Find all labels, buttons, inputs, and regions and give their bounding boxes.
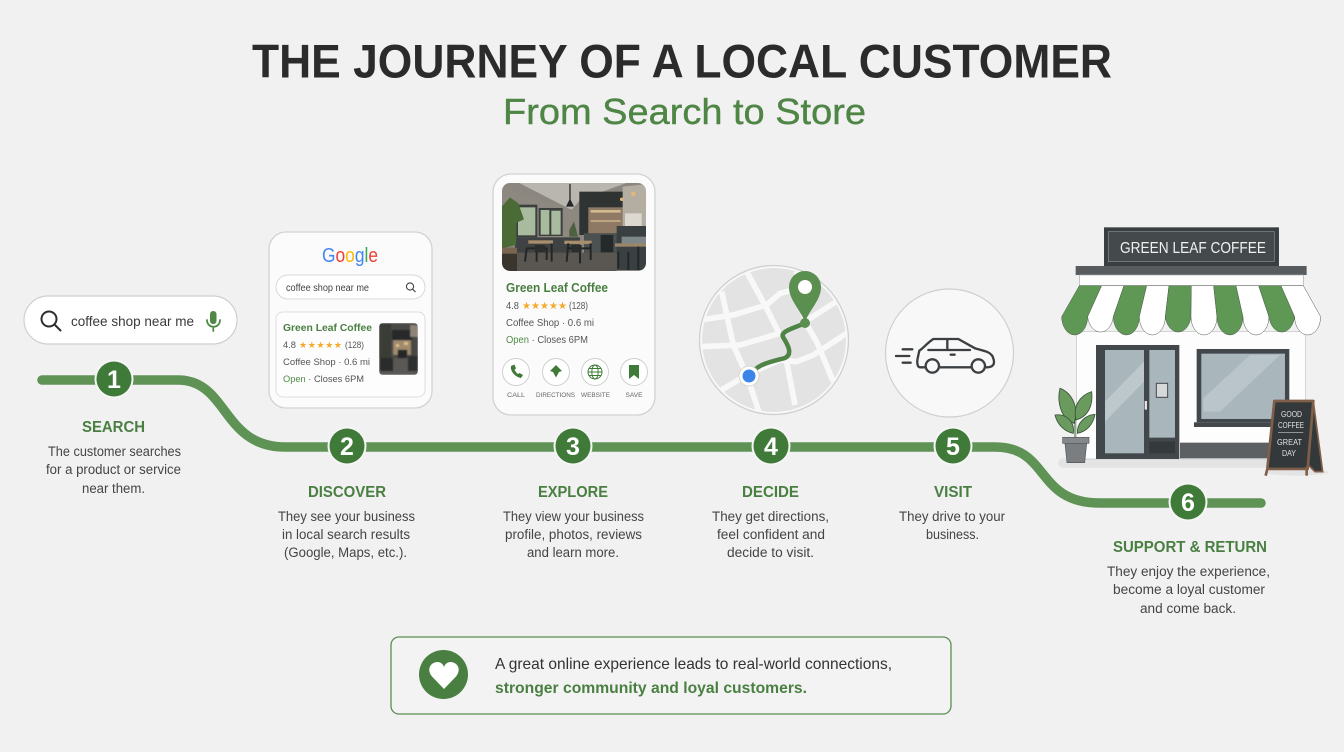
icon: call: [502, 358, 530, 399]
door: [1096, 345, 1179, 459]
chalkboard text: [1277, 410, 1304, 458]
icon: directions: DIRECTIONS: [536, 392, 576, 399]
subtitle: From Search to Store: [503, 91, 866, 132]
step 3 text: [503, 484, 644, 560]
step 6 text: become a loyal customer: [1113, 582, 1266, 597]
icon: car: [896, 339, 994, 373]
step 2 text: (Google, Maps, etc.).: [284, 545, 407, 560]
callout: [391, 637, 951, 714]
icon: save: SAVE: [626, 392, 643, 399]
step 2 text: DISCOVER: [308, 484, 386, 501]
step 5 marker: [934, 426, 972, 466]
search query: coffee shop near me: [71, 313, 194, 329]
step 4 text: decide to visit.: [727, 545, 814, 560]
hours: Open · Closes 6PM: [506, 335, 588, 346]
journey path: [42, 380, 1261, 503]
step 1 text: SEARCH: [82, 419, 145, 436]
listing card: (128): [345, 340, 364, 351]
route: [749, 323, 805, 376]
chalkboard legs: [1307, 402, 1323, 472]
storefront illustration: [1055, 227, 1328, 476]
step 4 text: DECIDE: [742, 484, 799, 501]
panel: search bar: [24, 296, 237, 344]
step 4 marker: [752, 426, 790, 466]
panel: business profile card: [493, 174, 655, 415]
rating: ★★★★★: [522, 301, 567, 312]
step 6 text: They enjoy the experience,: [1107, 564, 1270, 579]
icon: directions: [536, 358, 576, 399]
step 2 marker: 2: [340, 433, 354, 461]
step 6 marker: [1168, 482, 1208, 522]
icon: origin dot: [739, 366, 759, 386]
step 4 text: [712, 484, 829, 560]
icon: microphone: [207, 311, 220, 331]
step 1 marker: [94, 360, 134, 398]
icon: destination pin: [789, 271, 821, 328]
callout text: stronger community and loyal customers.: [495, 680, 807, 697]
listing card: Green Leaf Coffee: [283, 322, 372, 334]
step 6 text: SUPPORT & RETURN: [1113, 539, 1267, 556]
step 1 text: for a product or service: [46, 462, 181, 477]
chalkboard text: DAY: [1282, 449, 1297, 458]
window: [1197, 349, 1289, 422]
step 1 text: near them.: [82, 481, 145, 496]
chalkboard text: COFFEE: [1278, 421, 1304, 430]
listing card: ★★★★★: [299, 341, 342, 351]
listing card: Open · Closes 6PM: [283, 374, 364, 385]
step 3 text: profile, photos, reviews: [505, 527, 642, 542]
step 4 text: feel confident and: [717, 527, 825, 542]
step 2 text: They see your business: [278, 509, 415, 524]
step 4 marker: 4: [764, 433, 778, 461]
listing card: Coffee Shop · 0.6 mi: [283, 357, 370, 368]
profile name: Green Leaf Coffee: [506, 281, 608, 295]
step 5 text: VISIT: [934, 484, 973, 501]
listing card: [276, 312, 425, 397]
step 3 text: EXPLORE: [538, 484, 608, 501]
rating: 4.8: [506, 301, 519, 312]
step 5 text: [899, 484, 1005, 542]
step 3 text: They view your business: [503, 509, 644, 524]
awning: [1062, 286, 1321, 335]
results search box: coffee shop near me: [286, 283, 369, 294]
step 6 marker: 6: [1181, 489, 1195, 517]
plant: [1055, 388, 1095, 463]
step 5 text: They drive to your: [899, 509, 1005, 524]
chalkboard text: GOOD: [1281, 410, 1302, 419]
chalkboard text: GREAT: [1277, 438, 1302, 447]
category: Coffee Shop · 0.6 mi: [506, 318, 594, 329]
step 1 text: The customer searches: [48, 444, 181, 459]
step 4 text: They get directions,: [712, 509, 829, 524]
icon: heart: [419, 650, 468, 699]
panel: google results card: [269, 232, 432, 408]
icon: save: [620, 358, 648, 399]
listing card: 4.8: [283, 340, 296, 351]
step 5 text: business.: [926, 527, 979, 542]
rating: [506, 301, 588, 312]
step 2 text: [278, 484, 415, 560]
title: THE JOURNEY OF A LOCAL CUSTOMER: [252, 34, 1112, 88]
step 2 marker: [328, 426, 366, 466]
rating: (128): [569, 301, 588, 312]
icon: magnifier: [42, 312, 60, 330]
step 3 marker: [554, 426, 592, 466]
step 3 marker: 3: [566, 433, 580, 461]
step 2 text: in local search results: [282, 527, 410, 542]
car illustration: [886, 289, 1014, 417]
icon: website: WEBSITE: [581, 392, 611, 399]
callout text: [495, 656, 892, 697]
step 1 marker: 1: [107, 366, 121, 394]
step 1 text: [46, 419, 181, 496]
cafe photo: [502, 183, 646, 271]
step 5 marker: 5: [946, 433, 960, 461]
icon: website: [581, 358, 611, 399]
sign text: GREEN LEAF COFFEE: [1120, 240, 1266, 257]
step 6 text: and come back.: [1140, 601, 1236, 616]
results search box: [276, 275, 425, 299]
google logo: Google: [322, 245, 378, 267]
step 3 text: and learn more.: [527, 545, 619, 560]
map illustration: [700, 266, 848, 415]
step 6 text: [1107, 539, 1270, 616]
callout text: A great online experience leads to real-world connections,: [495, 656, 892, 673]
listing photo: [379, 323, 418, 375]
icon: call: CALL: [507, 392, 525, 399]
